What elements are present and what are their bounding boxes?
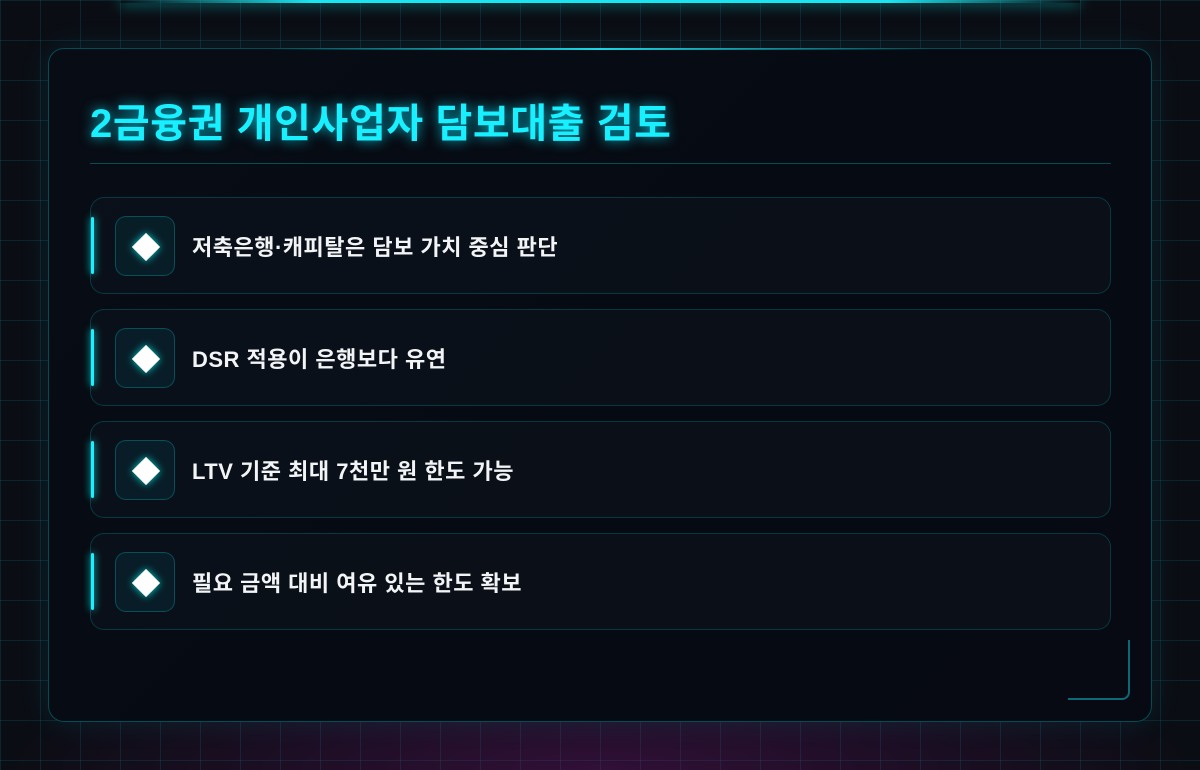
icon: diamond (115, 552, 175, 612)
item 4 (90, 533, 1111, 630)
text 2: DSR 적용이 은행보다 유연 (192, 347, 446, 372)
icon: diamond (115, 328, 175, 388)
text 1: 저축은행·캐피탈은 담보 가치 중심 판단 (192, 235, 558, 260)
icon: diamond (115, 440, 175, 500)
text 3: LTV 기준 최대 7천만 원 한도 가능 (192, 459, 514, 484)
title: 2금융권 개인사업자 담보대출 검토 (90, 102, 672, 146)
icon: diamond (115, 216, 175, 276)
text 4: 필요 금액 대비 여유 있는 한도 확보 (192, 571, 522, 596)
item 1 (90, 197, 1111, 294)
item 3 (90, 421, 1111, 518)
item 2 (90, 309, 1111, 406)
